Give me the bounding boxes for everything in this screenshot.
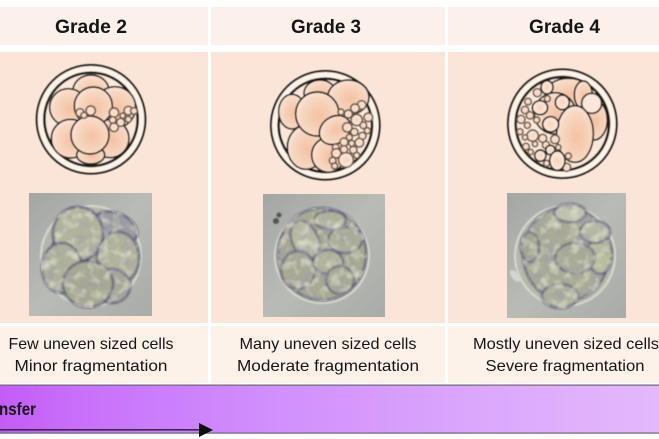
caption: grade 4 [473,336,659,375]
caption: grade 2: Minor fragmentation [14,358,168,375]
photo: grade 3 embryo micrograph [263,194,385,317]
caption background: grade 3 [211,326,445,383]
panel: grade 2 column [0,7,208,383]
caption background: grade 4 [448,326,659,383]
debris [273,212,282,224]
panel background: grade 3 [211,52,445,323]
icon: grade 4 embryo diagram [508,69,617,178]
heading: grade 3: Grade 3 [291,17,361,38]
heading background: grade 3 [211,7,445,45]
heading: grade 2: Grade 2 [55,17,127,38]
panel: grade 3 column [211,7,445,383]
heading background: grade 4 [448,7,659,45]
gradient bar [0,384,659,437]
panel background: grade 2 [0,52,208,323]
caption: grade 4: Severe fragmentation [486,358,644,375]
arrow [0,423,213,437]
icon: grade 3 embryo diagram [271,71,380,180]
panel: grade 4 column [448,7,659,383]
bar label: nsfer [0,399,36,419]
caption: grade 4: Mostly uneven sized cells [473,336,659,353]
icon: grade 2 embryo diagram [37,65,145,174]
photo: grade 4 embryo micrograph [507,193,626,318]
heading background: grade 2 [0,7,208,45]
caption: grade 2 [8,336,174,375]
photo: grade 2 embryo micrograph [29,193,152,316]
caption background: grade 2 [0,326,208,383]
caption: grade 2: Few uneven sized cells [8,336,174,353]
panel background: grade 4 [448,52,659,323]
heading: grade 4: Grade 4 [529,17,600,38]
caption: grade 3: Moderate fragmentation [237,358,419,375]
debris [508,268,522,284]
caption: grade 3 [237,336,419,375]
caption: grade 3: Many uneven sized cells [240,336,416,353]
